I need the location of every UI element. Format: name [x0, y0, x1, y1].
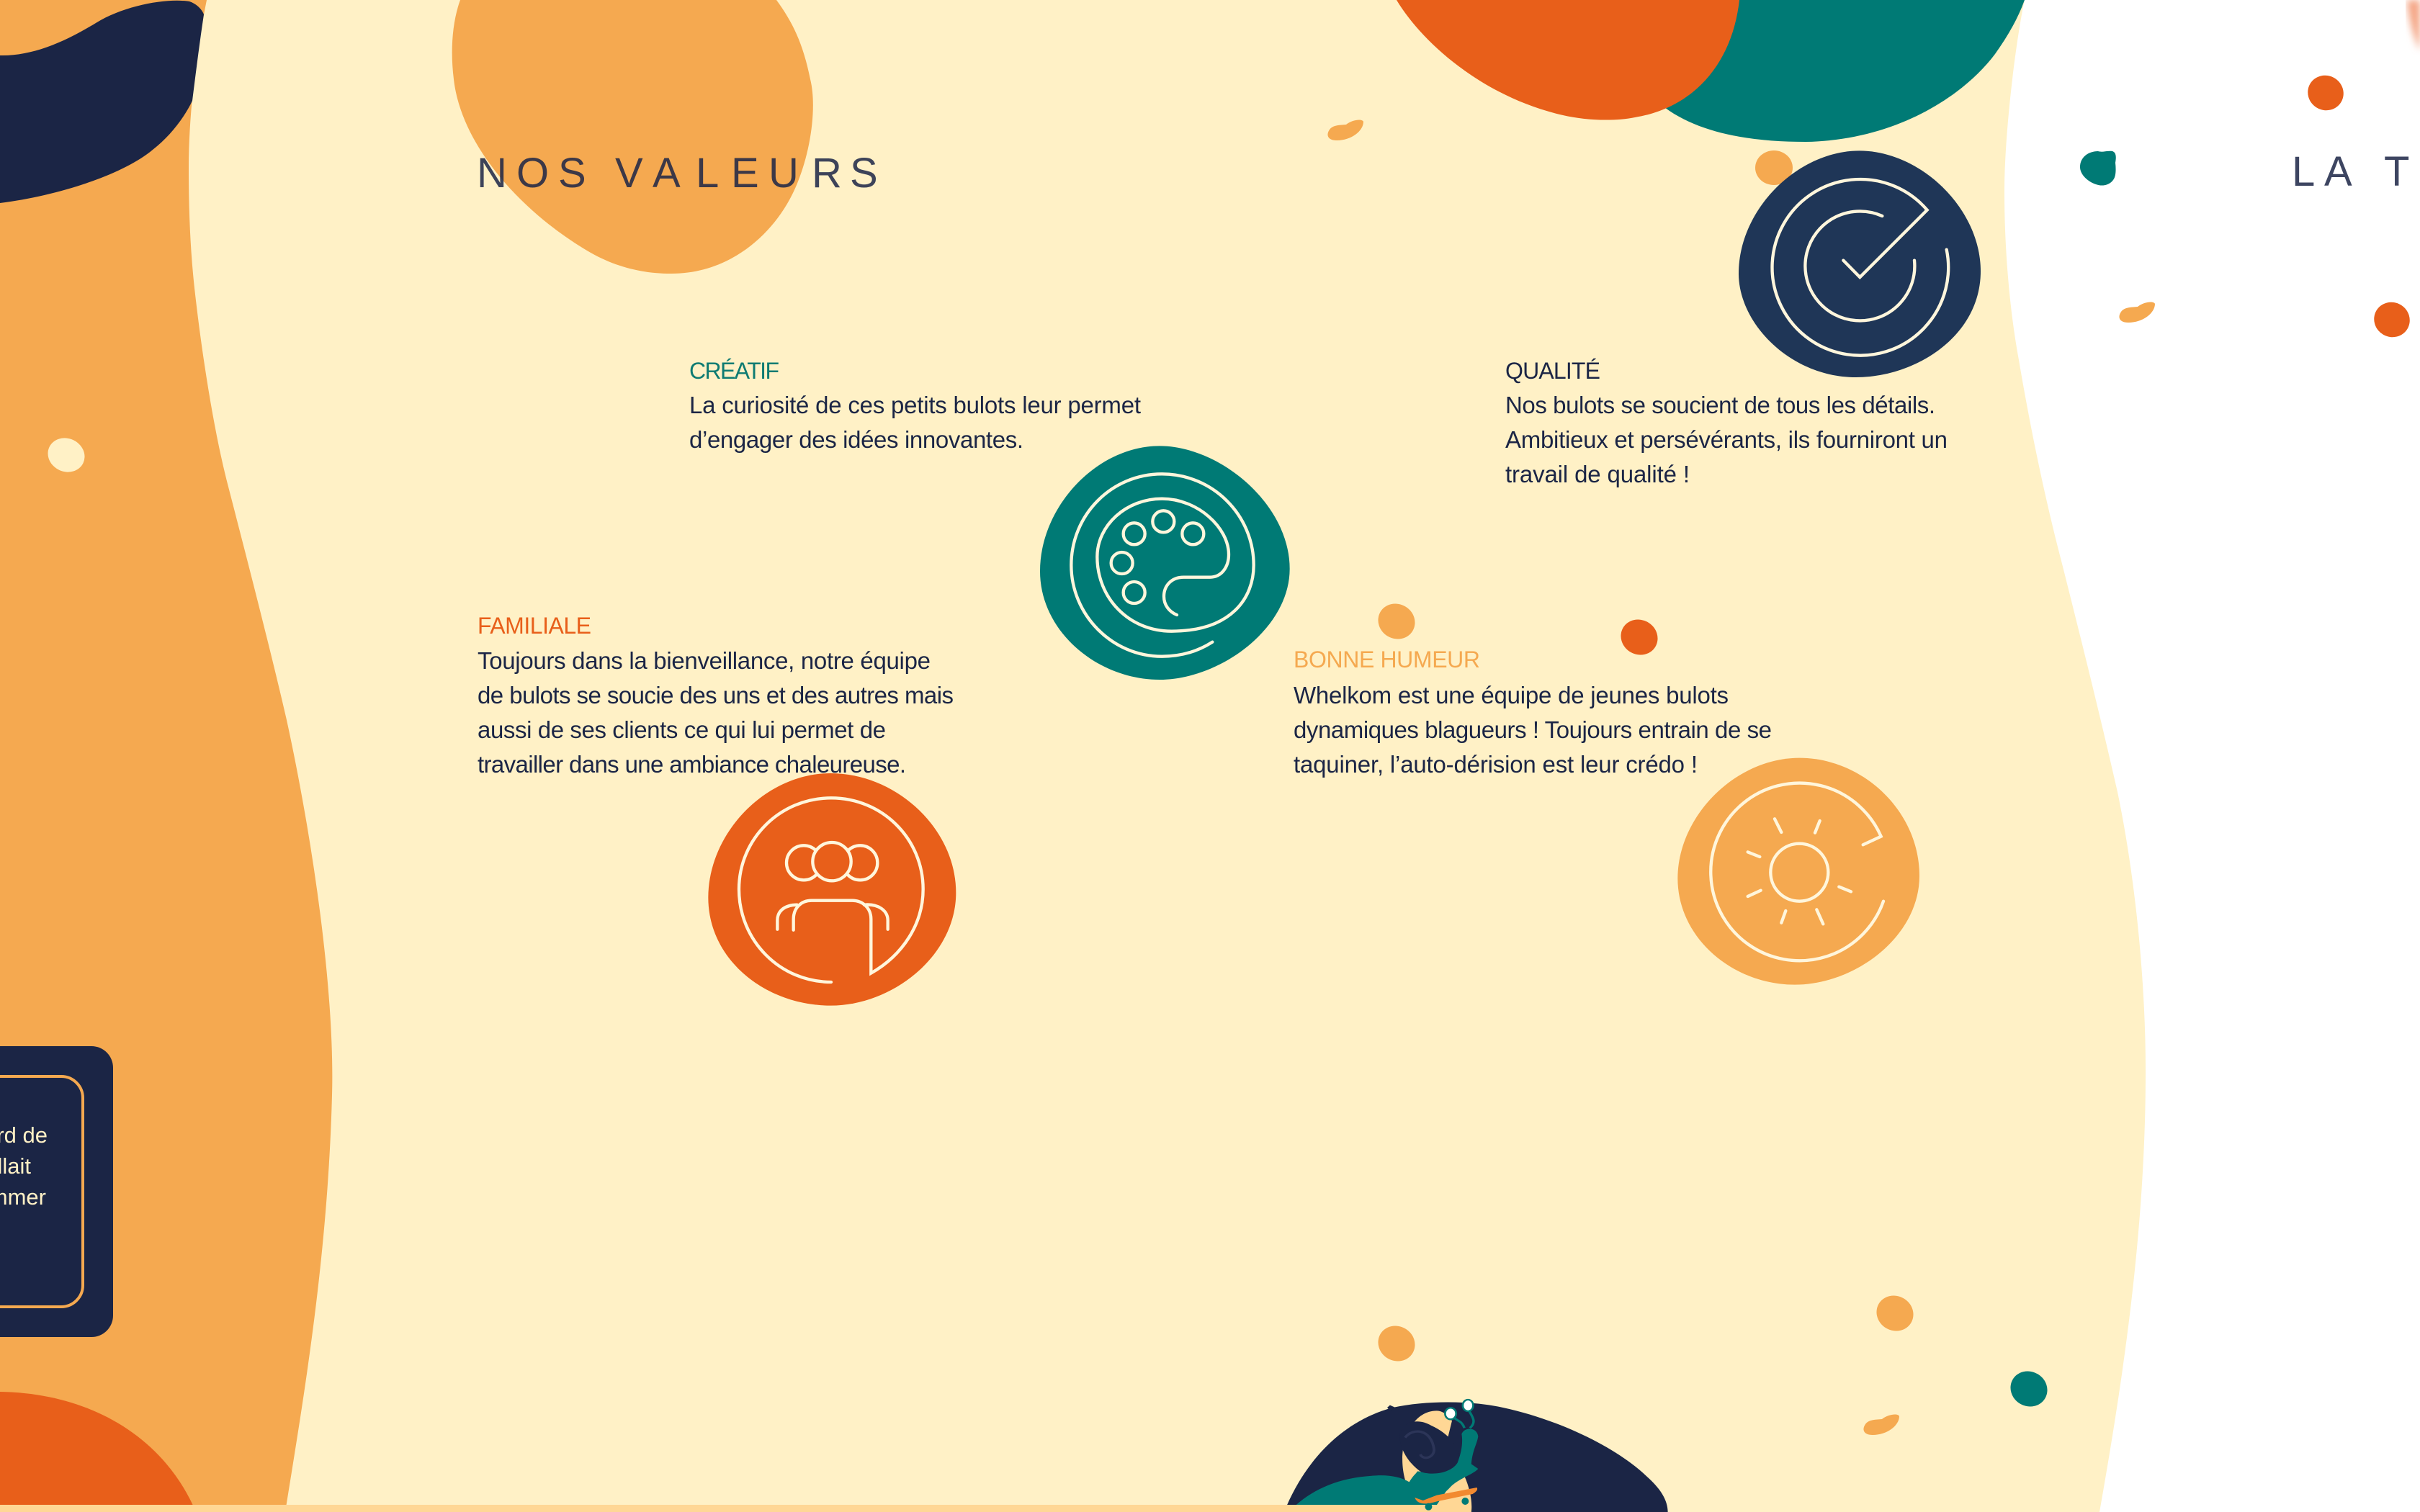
- top red blob: [1397, 0, 1739, 120]
- text block: qualite: [1505, 358, 1948, 487]
- text block: qualite: travail de qualité !: [1505, 461, 1690, 487]
- text block: creatif: CRÉATIF: [689, 358, 779, 384]
- text block: creatif: d’engager des idées innovantes.: [689, 426, 1023, 453]
- text block: qualite: Nos bulots se soucient de tous les détails.: [1505, 392, 1935, 418]
- text block: bonne humeur: dynamiques blagueurs ! Toujours entrain de se: [1294, 716, 1772, 743]
- text block: bonne humeur: [1294, 647, 1772, 778]
- text block: qualite: QUALITÉ: [1505, 358, 1600, 384]
- text block: bonne humeur: BONNE HUMEUR: [1294, 647, 1480, 672]
- heading blob: [452, 0, 813, 274]
- text block: familiale: [478, 613, 954, 778]
- left orange background: [0, 0, 432, 1512]
- icon: sun: [1677, 758, 1919, 985]
- icon: quality check: [1739, 150, 1981, 377]
- bottom-left red blob: [0, 1392, 196, 1512]
- top teal blob: [1657, 0, 2025, 142]
- top-left navy blob: [0, 1, 204, 203]
- text block: familiale: de bulots se soucie des uns et des autres mais: [478, 682, 954, 708]
- text block: bonne humeur: taquiner, l’auto-dérision est leur crédo !: [1294, 751, 1698, 778]
- heading: nos valeurs: NOS VALEURS: [477, 150, 878, 197]
- top-right blurred shape: [2407, 0, 2420, 50]
- illustration: snail on skateboard: [0, 1400, 1668, 1512]
- text block: bonne humeur: Whelkom est une équipe de jeunes bulots: [1294, 682, 1729, 708]
- text block: familiale: Toujours dans la bienveillance, notre équipe: [478, 647, 931, 674]
- text block: familiale: FAMILIALE: [478, 613, 591, 639]
- icon: palette: [1040, 446, 1290, 680]
- text block: familiale: aussi de ses clients ce qui lui permet de: [478, 716, 886, 743]
- text block: familiale: travailler dans une ambiance chaleureuse.: [478, 751, 906, 778]
- text block: creatif: La curiosité de ces petits bulots leur permet: [689, 392, 1141, 418]
- callout box: [0, 1046, 113, 1337]
- icon: family: [708, 773, 956, 1006]
- text block: qualite: Ambitieux et persévérants, ils fourniront un: [1505, 426, 1948, 453]
- text block: creatif: [689, 358, 1141, 453]
